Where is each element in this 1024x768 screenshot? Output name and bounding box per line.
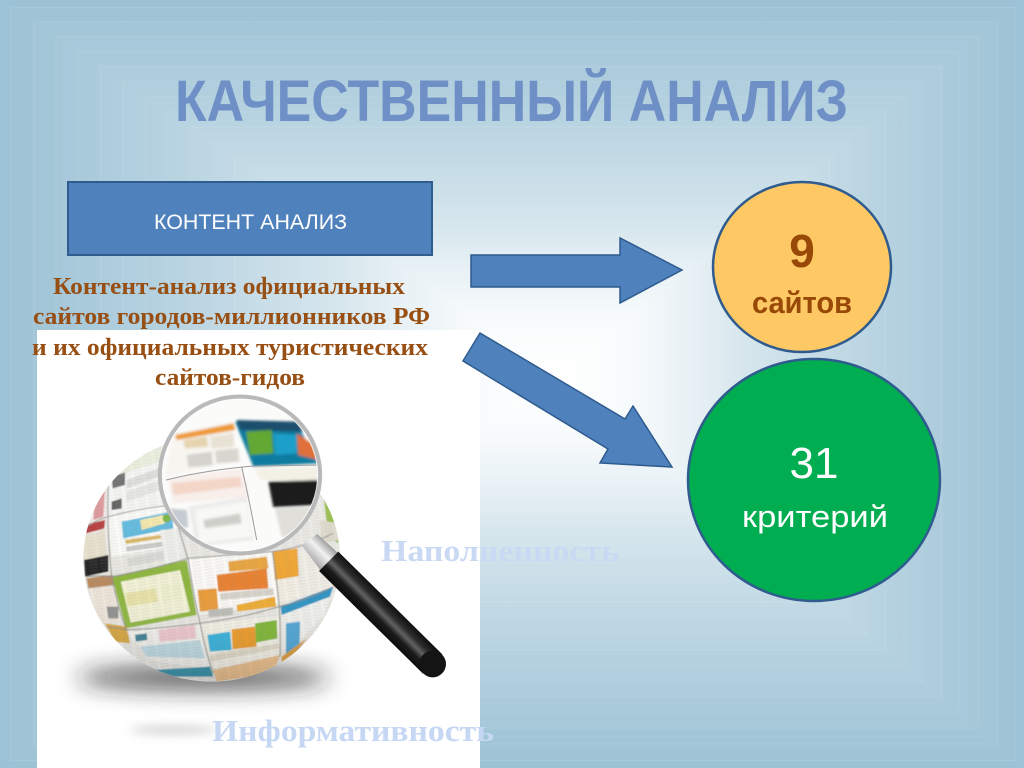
illustration: globe of websites under a magnifying glass xyxy=(77,397,446,734)
tile: tan left xyxy=(87,575,114,588)
text block: description: сайтов городов-миллионников РФ xyxy=(33,303,430,330)
text block: description: сайтов-гидов xyxy=(155,364,305,391)
globe shadow xyxy=(77,666,330,690)
small print texture on the pages xyxy=(84,449,340,682)
circle: 31 criteria: 31 xyxy=(790,439,838,488)
circle: 9 sites xyxy=(713,182,891,352)
magnifying glass lens xyxy=(160,397,320,553)
arrow: to 31 criteria xyxy=(463,333,672,467)
panel: white picture background xyxy=(37,330,480,768)
reflection shadow xyxy=(130,726,217,734)
circle: 9 sites: 9 xyxy=(789,225,815,277)
text block: description: Контент-анализ официальных xyxy=(53,273,406,300)
label: informativeness: Информативность xyxy=(212,713,494,748)
globe xyxy=(80,433,347,687)
text block: description xyxy=(32,273,430,391)
arrow: to 9 sites xyxy=(471,238,682,303)
tile: blue banner xyxy=(107,510,178,556)
tile: grey top left xyxy=(108,463,164,514)
tile: colourful bottom page xyxy=(202,617,281,669)
box: content analysis: КОНТЕНТ АНАЛИЗ xyxy=(154,211,347,234)
grid lines xyxy=(87,480,333,673)
tile: green page xyxy=(112,560,197,628)
tile: orange page xyxy=(188,552,278,615)
tile: right orange strip xyxy=(273,548,299,580)
tile: bottom left page xyxy=(126,624,210,667)
magnifying glass handle xyxy=(302,534,446,677)
circle: 31 criteria: критерий xyxy=(742,499,888,534)
text block: description: и их официальных туристических xyxy=(32,334,429,361)
circle: 31 criteria xyxy=(688,359,940,601)
label: completeness: Наполненность xyxy=(381,533,619,568)
title: КАЧЕСТВЕННЫЙ АНАЛИЗ xyxy=(175,69,848,134)
box: content analysis xyxy=(68,182,432,255)
circle: 9 sites: сайтов xyxy=(752,285,852,320)
tile: blue lower right xyxy=(282,598,329,648)
